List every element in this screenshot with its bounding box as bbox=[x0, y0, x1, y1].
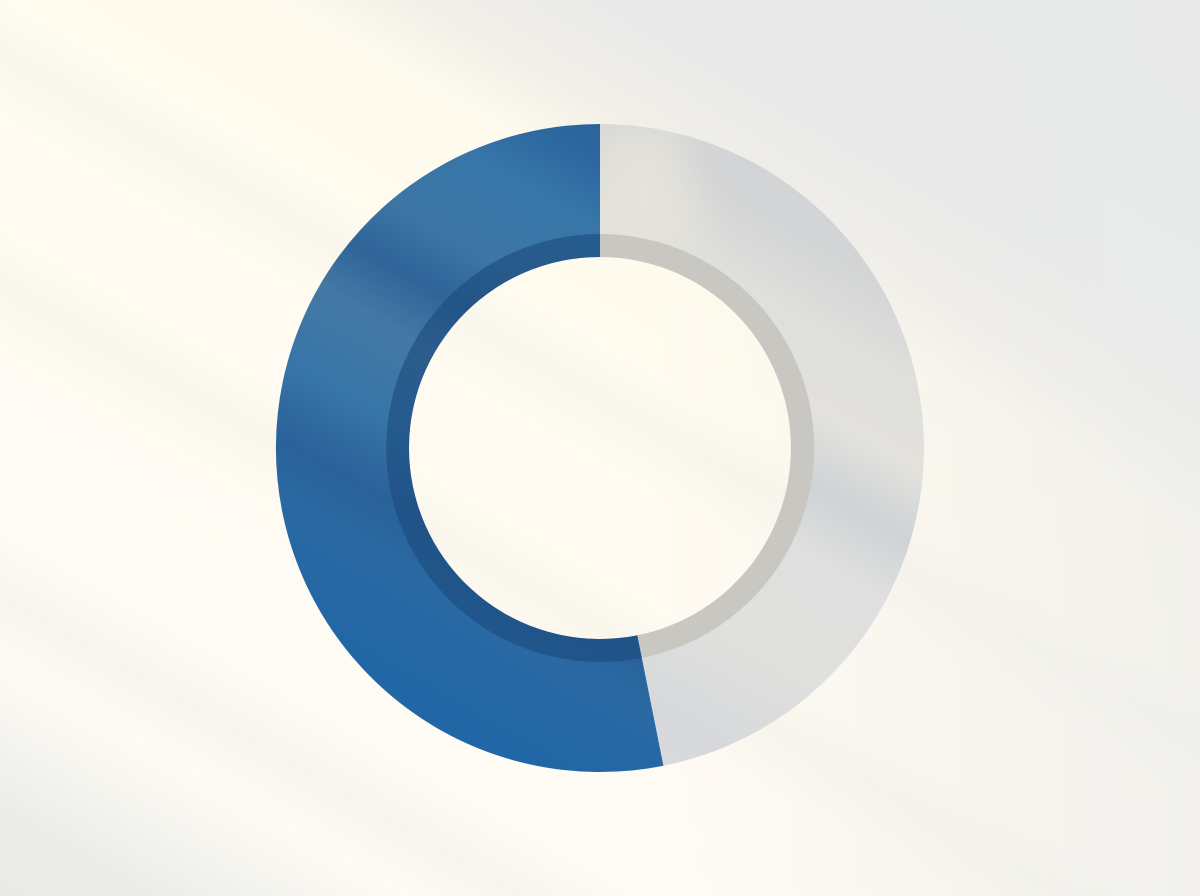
segment: grey remainder bbox=[600, 124, 924, 766]
segment: blue majority bbox=[276, 124, 664, 772]
donut chart bbox=[276, 124, 924, 772]
inner shaded ring bbox=[386, 234, 814, 662]
